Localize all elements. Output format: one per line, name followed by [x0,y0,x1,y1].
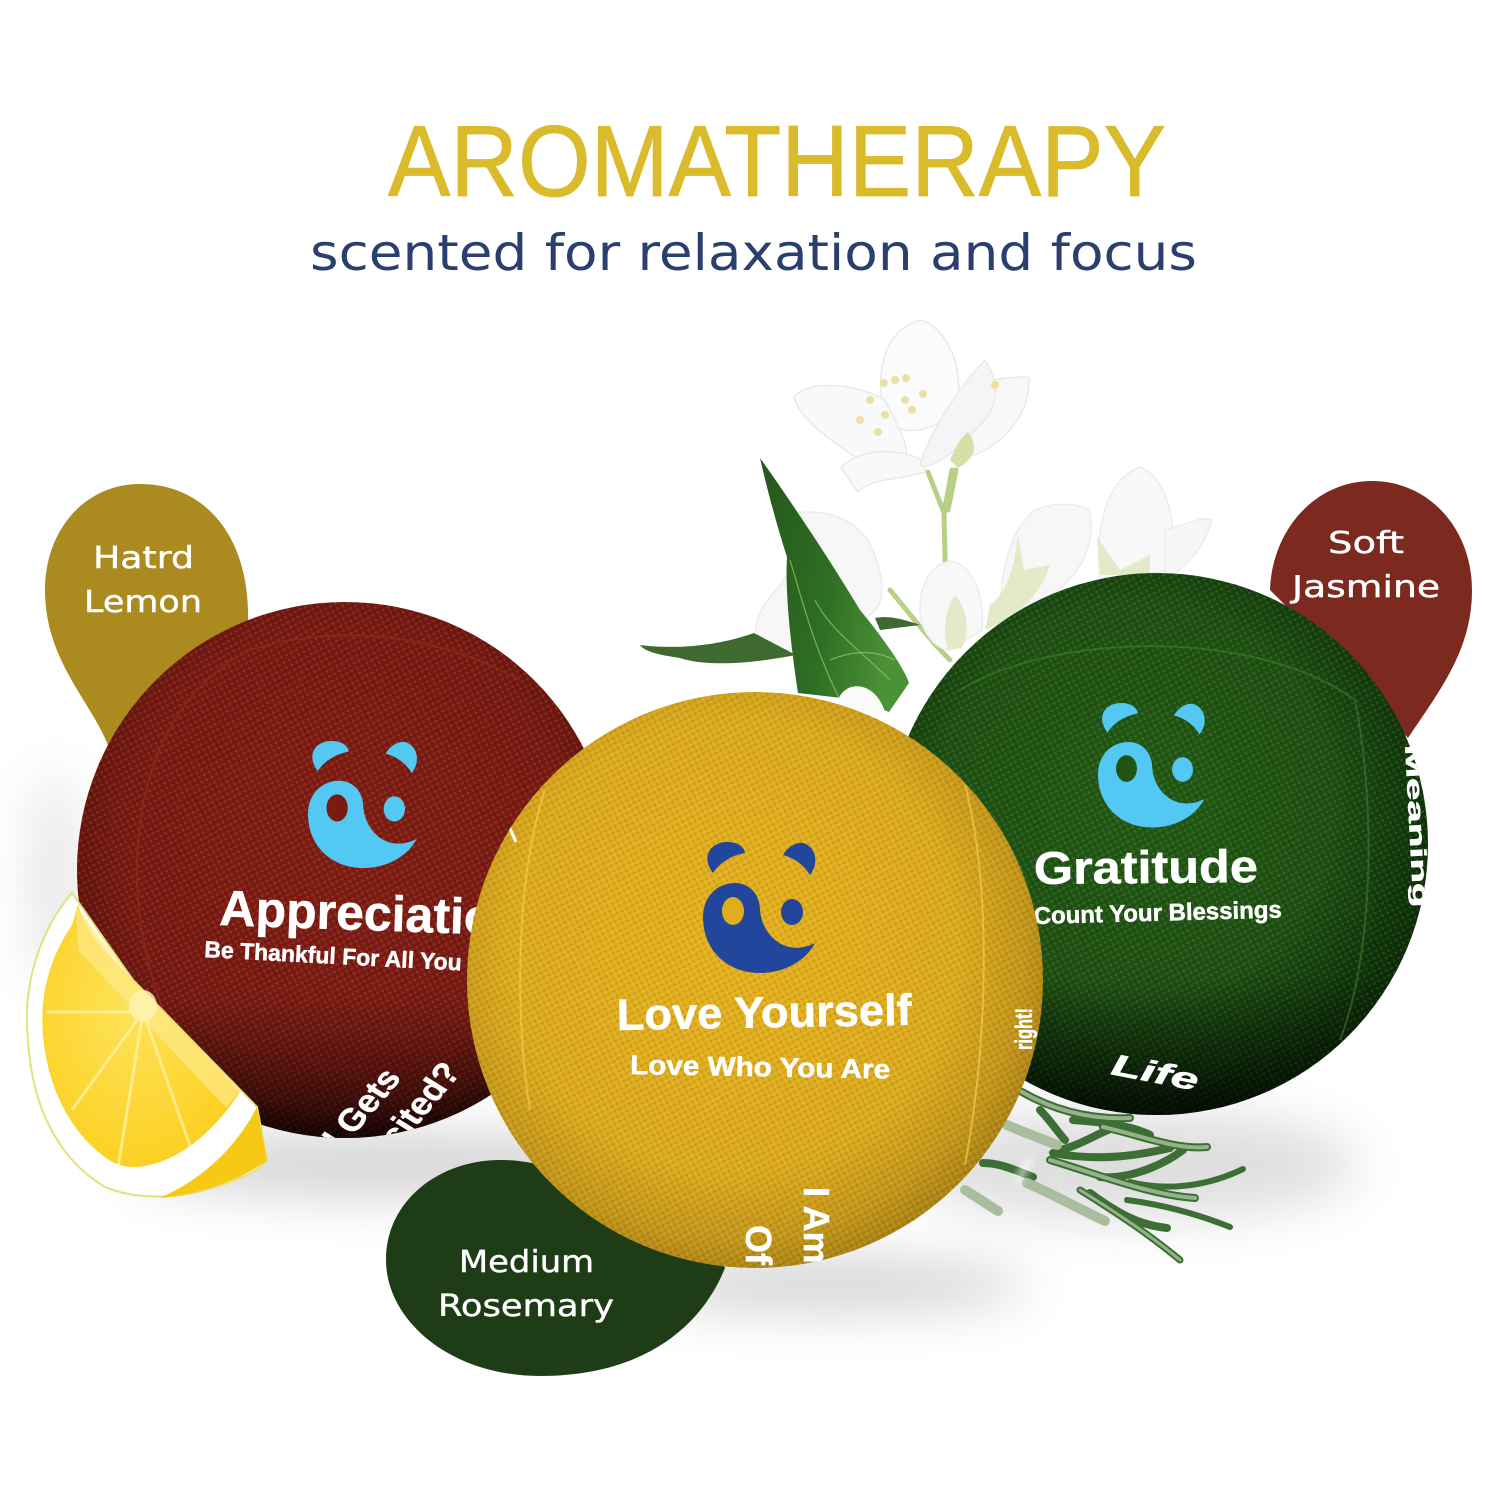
rosemary sprig [965,1092,1243,1260]
ball text: Gratitude [1034,840,1258,894]
bubble: hard lemon: Hatrd [93,541,194,576]
pale undersides [965,1125,1105,1221]
right buds [985,467,1212,630]
logo [1098,703,1205,827]
ball text [1033,744,1434,1098]
large leaf [760,458,909,712]
flesh [42,905,240,1167]
ball text [204,880,526,1198]
ball: yellow love yourself [467,692,1043,1268]
mist [1018,1160,1030,1180]
dark needles [983,1092,1243,1260]
ball text: right! [1011,1008,1038,1050]
ball text: Be Thankful For All You Have [204,936,524,979]
centre bud [920,561,983,650]
bubble: soft jasmine [1270,481,1472,738]
logo [703,842,815,973]
ball text: And Gets [279,1062,409,1198]
ball text: Love Who You Are [630,1050,890,1085]
left flower behind leaf [755,512,882,650]
jasmine sprig [640,320,1212,712]
upper flower [794,320,1029,492]
segments [46,1012,190,1168]
ball: red appreciation [77,602,584,1138]
light needles [1022,1092,1207,1260]
outer peel [160,1107,267,1198]
ball: green gratitude [886,573,1434,1115]
soft ground shadows [33,770,1360,1309]
subtitle: scented for relaxation and focus [310,224,1197,282]
lower bud [838,686,885,712]
ball text: Excited? [345,1056,469,1185]
bubble: hard lemon [45,484,250,745]
bubble: medium rosemary: Rosemary [438,1289,614,1324]
seam [960,646,1369,1040]
pale cut edge [76,906,240,1108]
bubble: medium rosemary [386,1160,725,1376]
ball text: Appreciation [219,880,526,947]
seam [137,635,520,1095]
lemon wedge [27,893,267,1198]
title: AROMATHERAPY [388,106,1166,218]
ball text: Count Your Blessings [1033,897,1282,930]
stems [890,470,956,660]
ball text: Life [1109,1048,1201,1098]
back leaf [875,617,920,630]
bubble: medium rosemary: Medium [459,1245,594,1280]
seam [520,785,984,1165]
ball text: Of Love [738,1225,779,1359]
bubble: soft jasmine: Jasmine [1289,570,1440,605]
bubble: soft jasmine: Soft [1328,526,1404,561]
core [129,990,157,1022]
ball text: Love Yourself [616,986,912,1040]
ball text [509,827,1038,1266]
ball text: I Am Worthy [796,1187,837,1397]
small leaf [640,633,796,663]
rind [27,893,267,1196]
logo [308,741,417,868]
stamens [856,374,999,436]
bubble: hard lemon: Lemon [84,585,202,620]
ball text: Meaning [1400,744,1434,908]
